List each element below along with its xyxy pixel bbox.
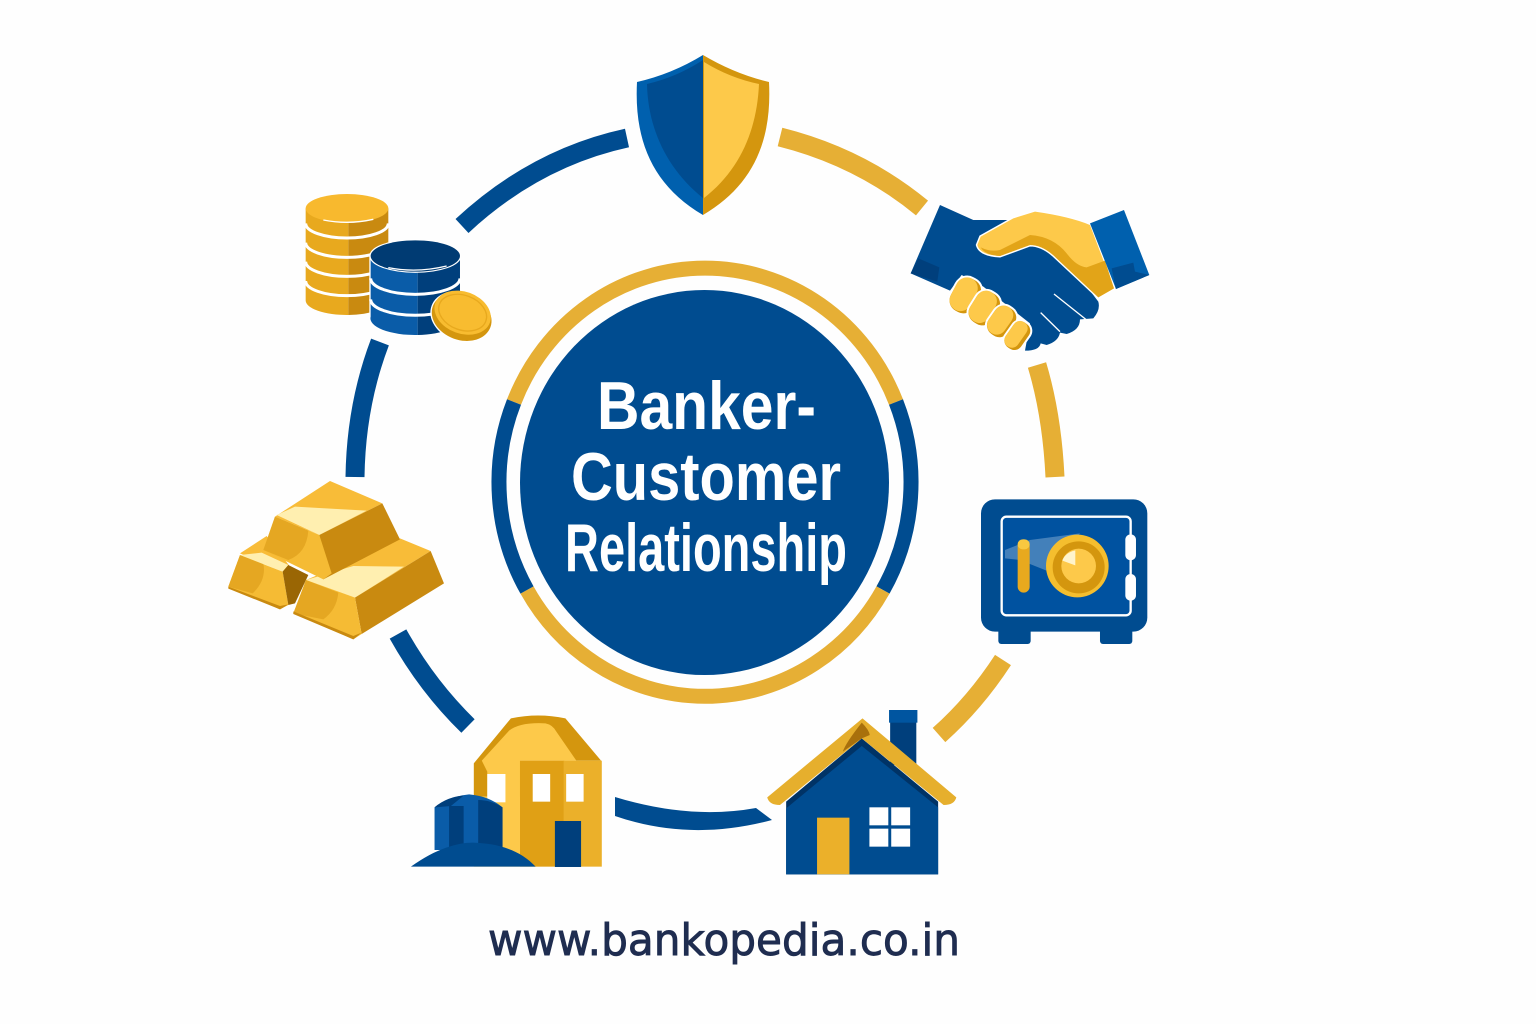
gold hand shade [981, 235, 1114, 297]
icon: coin stacks [306, 194, 498, 349]
roof ornament [843, 723, 870, 752]
finger 3 [983, 302, 1020, 341]
safe body [981, 499, 1147, 632]
blue cuff [1090, 210, 1149, 289]
arc: house to building [615, 797, 772, 830]
icon: bank building [411, 715, 602, 867]
arc: coins to shield [462, 138, 627, 226]
top bar [275, 481, 382, 535]
safe feet [998, 627, 1031, 644]
badge ring [499, 268, 911, 696]
gold stack [306, 208, 348, 315]
house body [786, 738, 938, 874]
light wall [474, 723, 576, 867]
badge title: Relationship [565, 510, 847, 586]
roof [767, 718, 956, 805]
arc: building to gold [398, 634, 468, 726]
left bar [240, 536, 290, 572]
finger 4 [1001, 318, 1034, 353]
door [555, 821, 581, 867]
outer cycle ring [355, 137, 1055, 830]
arc: gold to coins [355, 342, 380, 477]
main wall [520, 761, 564, 867]
badge title [565, 368, 847, 586]
finger 1 [945, 273, 985, 317]
cuff shade [911, 258, 939, 282]
loose coin [425, 284, 498, 349]
gold hand [977, 212, 1114, 297]
icon: safe [981, 499, 1147, 644]
icon: shield [637, 55, 769, 215]
right bar [306, 538, 431, 598]
safe door [1002, 517, 1131, 615]
arc: safe to house [939, 660, 1003, 735]
hinges [1125, 534, 1136, 560]
dial [1046, 535, 1109, 597]
chimney [890, 722, 916, 765]
icon: house [767, 710, 956, 874]
silo [435, 794, 503, 850]
finger gaps [1041, 294, 1087, 332]
icon: handshake [911, 205, 1149, 353]
gold fingers [945, 273, 1034, 353]
badge title: Customer [571, 439, 841, 515]
badge disc [520, 290, 889, 675]
finger 2 [964, 287, 1004, 330]
blue stack [370, 256, 418, 335]
badge title: Banker- [597, 368, 816, 444]
roof [474, 715, 601, 797]
light beam [1005, 533, 1080, 573]
arc: shield to handshake [780, 137, 922, 208]
blue hand [911, 205, 1099, 351]
door [817, 818, 849, 874]
arc: handshake to safe [1037, 365, 1055, 477]
icon: gold bars [228, 481, 444, 639]
window [869, 807, 910, 847]
handle [1018, 539, 1030, 593]
central badge [499, 268, 911, 696]
shadow gap [283, 565, 308, 605]
mound [411, 843, 536, 867]
windows [487, 774, 584, 802]
website url: www.bankopedia.co.in [488, 915, 960, 966]
